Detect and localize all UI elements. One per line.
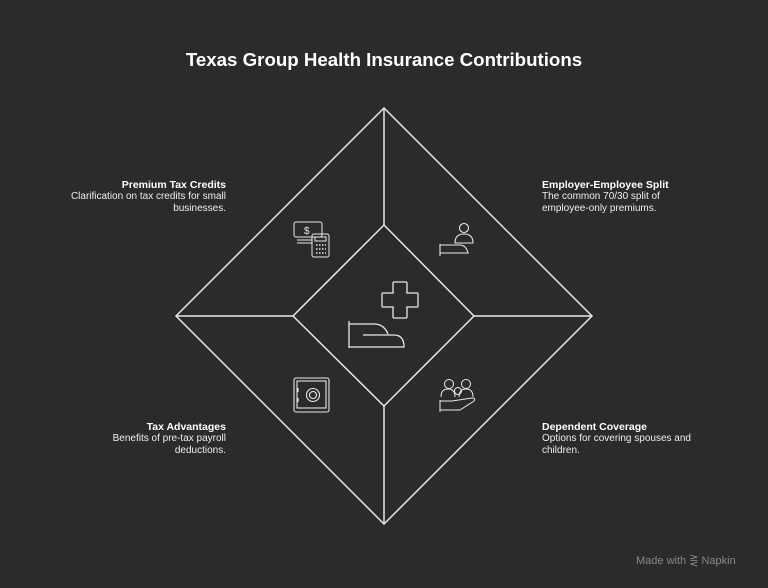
outer diamond [176, 108, 592, 524]
text: premium tax credits [71, 179, 226, 214]
icon: center health hand [349, 282, 418, 348]
icon: person hand [440, 224, 473, 256]
inner diamond [293, 225, 474, 406]
footer: Made with ⋛ Napkin [636, 555, 736, 567]
text: employer-employee split [542, 179, 669, 214]
icon: money calculator [294, 222, 329, 257]
text: employer-employee split: The common 70/30 split of employee-only premiums. [542, 191, 660, 214]
text: dependent coverage: Dependent Coverage [542, 421, 647, 433]
text: premium tax credits: Premium Tax Credits [122, 179, 226, 191]
text: tax advantages [113, 421, 226, 456]
text: employer-employee split: Employer-Employee Split [542, 179, 669, 191]
icon: family hand [440, 380, 475, 412]
title: Texas Group Health Insurance Contributions [186, 49, 582, 70]
text: premium tax credits: Clarification on tax credits for small businesses. [71, 191, 226, 214]
icon: safe [294, 378, 329, 412]
text: tax advantages: Tax Advantages [147, 421, 226, 433]
text: dependent coverage [542, 421, 691, 456]
connectors [176, 108, 592, 524]
icon: money calculator: $ [304, 226, 310, 237]
text: dependent coverage: Options for covering spouses and children. [542, 433, 691, 456]
text: tax advantages: Benefits of pre-tax payroll deductions. [113, 433, 226, 456]
